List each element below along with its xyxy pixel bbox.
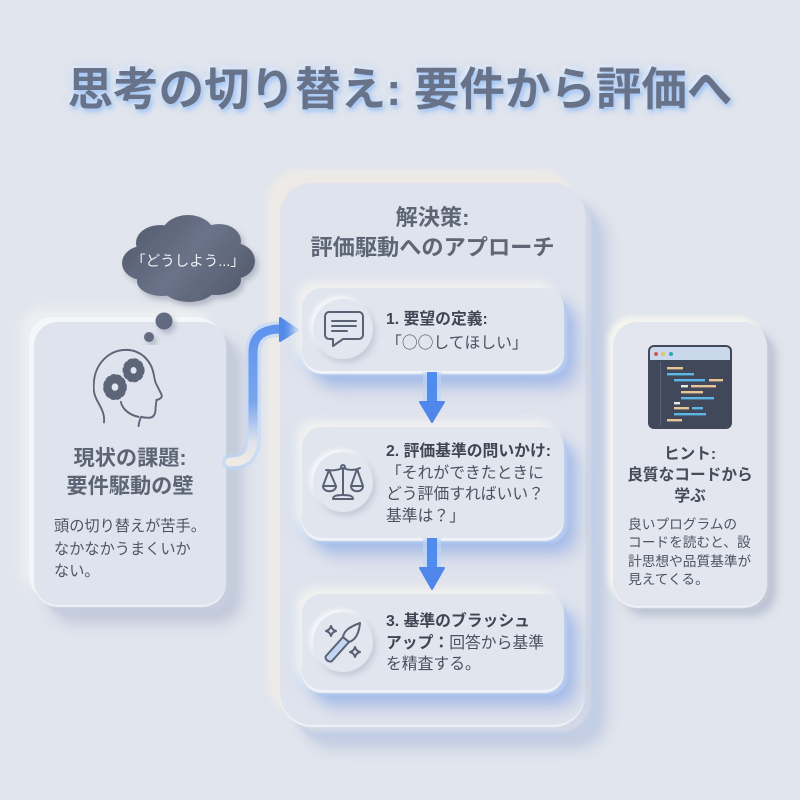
icon: brush with sparkles bbox=[313, 612, 373, 672]
text: hint body: 計思想や品質基準が bbox=[628, 554, 751, 569]
text: hint body: 見えてくる。 bbox=[628, 572, 709, 587]
panel: hint bbox=[613, 322, 767, 606]
step 2 card bbox=[302, 427, 564, 538]
panel: current problem bbox=[34, 322, 226, 605]
text: hint body bbox=[628, 517, 751, 587]
step 3 text: アップ：回答から基準 bbox=[386, 634, 544, 652]
heading: hint: 良質なコードから bbox=[627, 467, 753, 484]
step 1 card bbox=[302, 288, 564, 371]
text: current problem body bbox=[54, 518, 206, 580]
heading: hint: ヒント: bbox=[664, 446, 716, 463]
step 3 text: を精査する。 bbox=[386, 656, 481, 673]
step 2 text bbox=[386, 442, 551, 524]
title: 思考の切り替え: 要件から評価へ bbox=[68, 64, 732, 115]
icon: scales bbox=[313, 452, 373, 512]
heading: solution: 評価駆動へのアプローチ bbox=[310, 235, 555, 260]
heading: solution bbox=[310, 205, 555, 260]
step 3 text: 3. 基準のブラッシュ bbox=[386, 613, 530, 630]
text: current problem body: ない。 bbox=[54, 563, 100, 580]
step 2 text: どう評価すればいい？ bbox=[386, 486, 544, 503]
text: current problem body: なかなかうまくいか bbox=[54, 541, 191, 558]
heading: current problem bbox=[66, 446, 194, 498]
arrow: step 1 to 2 bbox=[419, 372, 445, 423]
step 1 text: 1. 要望の定義: bbox=[386, 311, 488, 328]
step 1 text: 「○○してほしい」 bbox=[386, 330, 528, 352]
text: hint body: コードを読むと、設 bbox=[628, 535, 751, 550]
icon: head with gears bbox=[93, 348, 163, 428]
heading: hint: 学ぶ bbox=[674, 488, 706, 505]
heading: solution: 解決策: bbox=[396, 205, 469, 230]
text: hint body: 良いプログラムの bbox=[628, 517, 737, 532]
step 2 text: 基準は？」 bbox=[386, 508, 465, 524]
step 2 text: 2. 評価基準の問いかけ: bbox=[386, 443, 551, 460]
step 3 text bbox=[386, 612, 544, 673]
heading: current problem: 現状の課題: bbox=[74, 447, 186, 470]
icon: speech bubble bbox=[313, 299, 373, 359]
cloud text: 「どうしよう...」 bbox=[131, 253, 245, 270]
arrow: problem to solution bbox=[222, 317, 299, 470]
arrow: step 2 to 3 bbox=[419, 538, 445, 590]
text: current problem body: 頭の切り替えが苦手。 bbox=[54, 518, 206, 535]
step 3 card bbox=[302, 594, 564, 690]
heading: hint bbox=[627, 446, 753, 505]
step 2 text: 「それができたときに bbox=[386, 464, 544, 482]
heading: current problem: 要件駆動の壁 bbox=[66, 475, 194, 498]
step 1 text bbox=[386, 310, 528, 352]
panel: solution bbox=[280, 183, 585, 725]
icon: code window bbox=[648, 345, 732, 429]
thought cloud bbox=[122, 215, 260, 345]
